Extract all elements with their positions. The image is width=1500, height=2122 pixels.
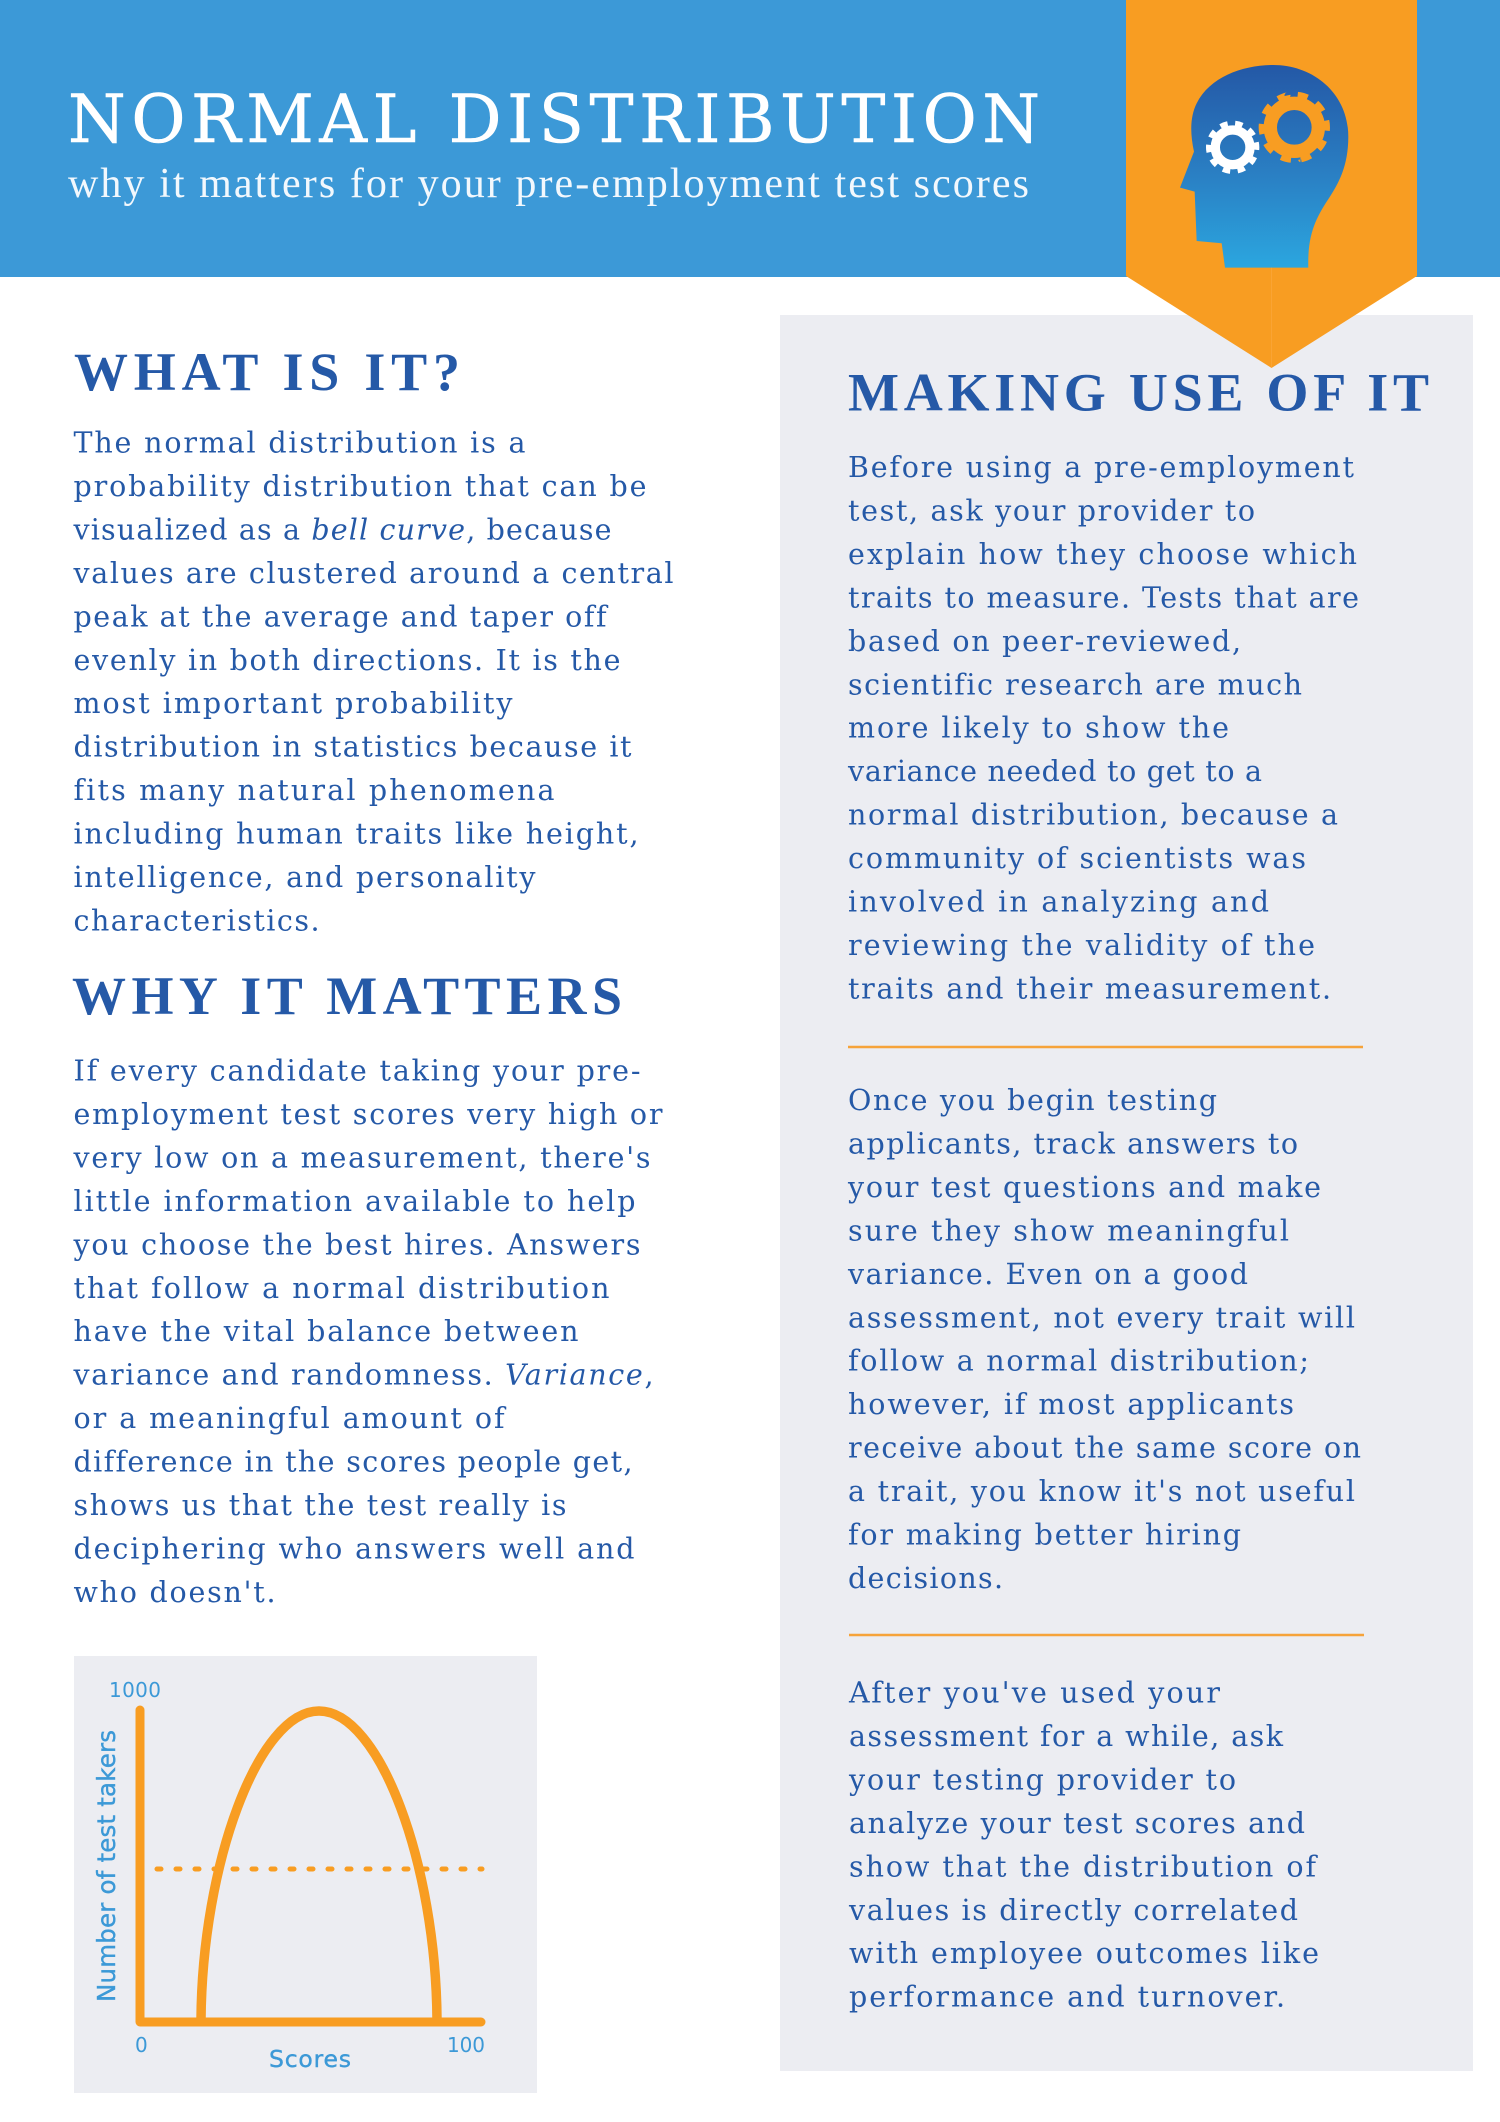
text block: what is it: characteristics. xyxy=(74,904,320,937)
chart: score distribution xyxy=(74,1656,537,2093)
text block: why it matters: shows us that the test really is xyxy=(74,1489,566,1522)
text block: once you begin: assessment, not every trait will xyxy=(848,1301,1355,1334)
text block: once you begin: decisions. xyxy=(848,1562,1003,1595)
text block: what is it: most important probability xyxy=(74,687,513,720)
heading: what is it: WHAT IS IT? xyxy=(74,342,460,402)
text block: before using: based on peer-reviewed, xyxy=(848,625,1241,658)
icon: head with gears xyxy=(1180,65,1348,368)
x axis min label: 0 xyxy=(135,2033,148,2057)
text block: what is it: distribution in statistics because it xyxy=(74,731,632,764)
text block: once you begin: your test questions and make xyxy=(847,1171,1321,1204)
text block: before using: traits to measure. Tests that are xyxy=(848,581,1359,614)
text block: before using: scientific research are much xyxy=(848,668,1302,701)
orange banner xyxy=(1126,0,1417,368)
text block: once you begin: a trait, you know it's not useful xyxy=(848,1475,1355,1508)
text block: after you've used: values is directly correlated xyxy=(848,1894,1298,1927)
text block: what is it: intelligence, and personality xyxy=(74,861,536,894)
text block: what is it: probability distribution that can be xyxy=(74,470,646,503)
text block: why it matters: that follow a normal distribution xyxy=(74,1272,610,1305)
text block: before using: test, ask your provider to xyxy=(848,494,1255,528)
text block: once you begin: variance. Even on a good xyxy=(847,1258,1248,1291)
text block: what is it: evenly in both directions. It is the xyxy=(74,644,620,677)
panel: making use of it background xyxy=(780,315,1473,2071)
text block: once you begin: applicants, track answers to xyxy=(848,1128,1298,1160)
subtitle: why it matters for your pre-employment test scores xyxy=(68,161,1029,207)
x axis max label: 100 xyxy=(447,2033,485,2057)
text block: once you begin: sure they show meaningful xyxy=(848,1214,1289,1247)
text block: what is it: including human traits like height, xyxy=(74,818,638,851)
text block: what is it: peak at the average and taper off xyxy=(74,600,609,633)
text block: why it matters: employment test scores very high or xyxy=(74,1098,663,1131)
text block: why it matters: variance and randomness. Variance, xyxy=(72,1359,654,1392)
text block: why it matters xyxy=(72,1054,663,1609)
text block: what is it: visualized as a bell curve, because xyxy=(72,513,612,546)
text block: why it matters: very low on a measurement, there's xyxy=(72,1141,650,1174)
text block: why it matters: difference in the scores people get, xyxy=(74,1446,632,1479)
text block: what is it: The normal distribution is a xyxy=(74,426,526,460)
y axis max label: 1000 xyxy=(109,1678,161,1702)
text block: before using: variance needed to get to a xyxy=(847,755,1262,788)
text block: why it matters: If every candidate taking your pre- xyxy=(74,1054,640,1088)
text block: before using: involved in analyzing and xyxy=(848,886,1269,918)
heading: why it matters: WHY IT MATTERS xyxy=(72,966,622,1026)
text block: what is it: values are clustered around a central xyxy=(72,557,674,590)
text block: what is it xyxy=(72,426,674,937)
text block: after you've used: your testing provider to xyxy=(848,1763,1236,1796)
text block: after you've used: After you've used your xyxy=(848,1676,1220,1710)
header band xyxy=(0,0,1500,277)
curve xyxy=(201,1711,437,2020)
title: NORMAL DISTRIBUTION xyxy=(68,81,1040,158)
text block: before using: Before using a pre-employment xyxy=(848,451,1355,484)
text block: why it matters: you choose the best hires. Answers xyxy=(72,1228,640,1261)
text block: after you've used: performance and turnover. xyxy=(849,1981,1285,2014)
text block: after you've used: show that the distribution of xyxy=(849,1850,1318,1883)
text block: why it matters: have the vital balance between xyxy=(74,1315,578,1348)
text block: before using: normal distribution, because a xyxy=(848,799,1338,832)
text block: why it matters: or a meaningful amount of xyxy=(74,1402,507,1435)
text block: once you begin xyxy=(847,1084,1361,1595)
dashed average line xyxy=(157,1866,482,1872)
text block: once you begin: follow a normal distribution; xyxy=(848,1345,1309,1378)
text block: before using: more likely to show the xyxy=(848,712,1229,745)
text block: once you begin: receive about the same score on xyxy=(848,1432,1361,1465)
text block: once you begin: Once you begin testing xyxy=(848,1084,1217,1117)
text block: why it matters: little information available to help xyxy=(74,1185,636,1218)
text block: why it matters: deciphering who answers well and xyxy=(74,1532,634,1565)
text block: after you've used: assessment for a while, ask xyxy=(849,1720,1284,1753)
text block: before using: reviewing the validity of the xyxy=(848,929,1315,962)
text block: after you've used xyxy=(848,1676,1319,2014)
text block: before using: traits and their measurement. xyxy=(848,972,1331,1005)
text block: why it matters: who doesn't. xyxy=(74,1576,276,1609)
text block: once you begin: for making better hiring xyxy=(848,1518,1241,1552)
text block: once you begin: however, if most applicants xyxy=(848,1388,1294,1421)
text block: before using: community of scientists was xyxy=(848,842,1306,875)
x axis title: Scores xyxy=(269,2045,351,2073)
chart axes xyxy=(140,1710,481,2022)
text block: after you've used: analyze your test scores and xyxy=(849,1807,1305,1840)
text block: after you've used: with employee outcomes like xyxy=(849,1937,1319,1970)
text block: before using xyxy=(847,451,1359,1005)
text block: what is it: fits many natural phenomena xyxy=(74,774,554,807)
heading: making use of it: MAKING USE OF IT xyxy=(848,362,1429,422)
y axis title: Number of test takers xyxy=(92,1730,121,2002)
text block: before using: explain how they choose which xyxy=(848,538,1357,571)
